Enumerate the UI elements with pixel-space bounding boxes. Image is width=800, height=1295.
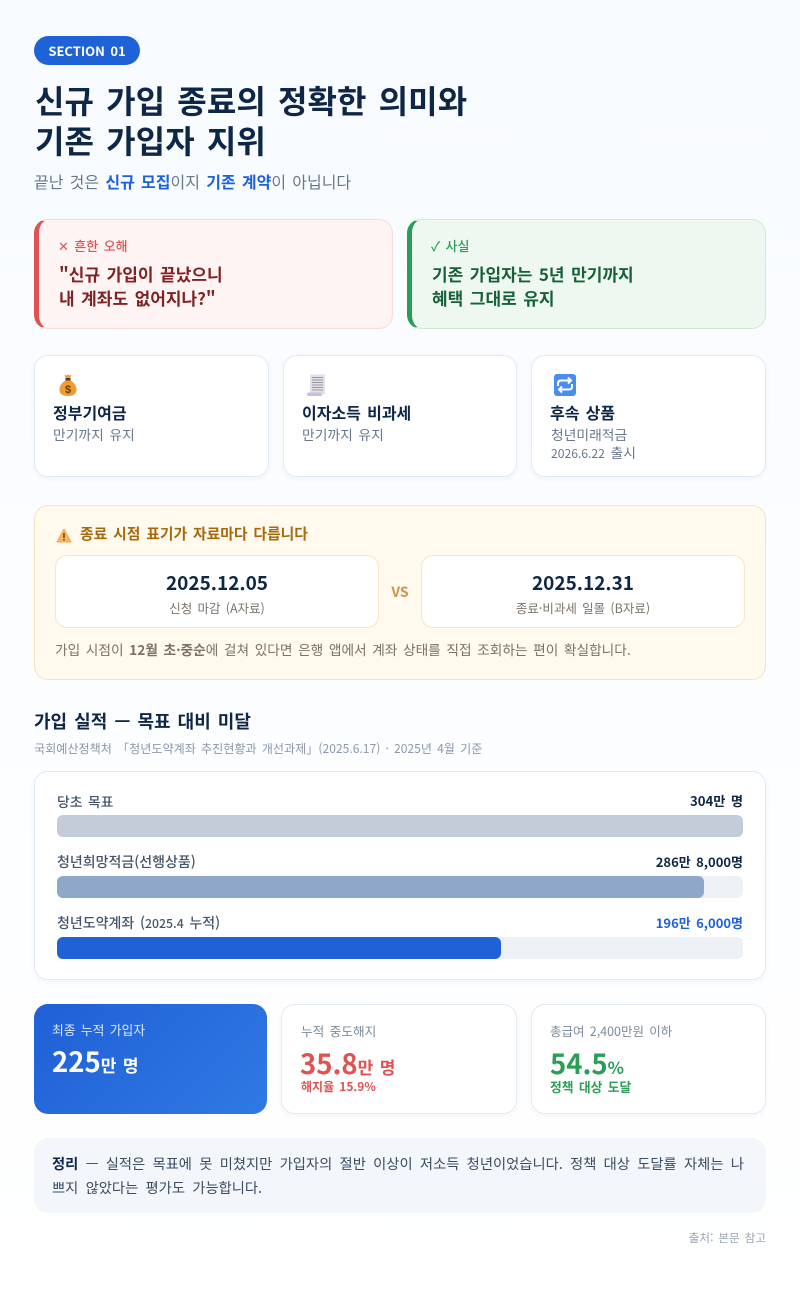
section badge <box>34 36 140 65</box>
stat label: 총급여 2,400만원 이하 <box>550 1021 672 1040</box>
card description: 청년미래적금 <box>551 424 627 444</box>
stat value: 225만 명 <box>52 1040 138 1080</box>
stat value: 54.5% <box>550 1042 624 1082</box>
bar: youth hope savings <box>57 852 743 898</box>
chart heading: 가입 실적 — 목표 대비 미달 <box>34 708 251 734</box>
card heading: 이자소득 비과세 <box>302 400 411 424</box>
subtitle: 끝난 것은 신규 모집이지 기존 계약이 아닙니다 <box>34 169 351 193</box>
card description: 만기까지 유지 <box>302 424 384 444</box>
icon: warning triangle <box>56 528 72 542</box>
panel: interest tax exemption card <box>283 355 517 477</box>
card description: 2026.6.22 출시 <box>551 442 636 462</box>
date B value: 2025.12.31 <box>532 569 634 596</box>
icon: repeat arrows <box>554 374 576 396</box>
title: 신규 가입 종료의 정확한 의미와 <box>35 77 467 123</box>
misconception quote <box>59 261 223 310</box>
stat value: 35.8만 명 <box>300 1042 395 1082</box>
stat note: 해지율 15.9% <box>301 1078 376 1095</box>
bar value: 196만 6,000명 <box>656 913 743 932</box>
date box A <box>55 555 379 628</box>
icon: receipt <box>307 374 325 396</box>
panel: fact <box>407 219 766 329</box>
chart source: 국회예산정책처 「청년도약계좌 추진현황과 개선과제」(2025.6.17) · 2025년 4월 기준 <box>34 740 482 757</box>
stat: cancellations <box>281 1004 517 1114</box>
panel: follow-up product card <box>531 355 766 477</box>
card description <box>551 424 636 462</box>
bar value: 304만 명 <box>690 791 743 810</box>
bar track and fill <box>57 937 743 959</box>
warning note: 가입 시점이 12월 초·중순에 걸쳐 있다면 은행 앱에서 계좌 상태를 직접 조회하는 편이 확실합니다. <box>55 639 631 659</box>
fact statement <box>432 261 634 310</box>
stat label: 누적 중도해지 <box>301 1021 376 1040</box>
date A caption: 신청 마감 (A자료) <box>169 598 265 617</box>
stat: total subscribers <box>34 1004 267 1114</box>
bar value: 286만 8,000명 <box>656 852 743 871</box>
stat note: 정책 대상 도달 <box>550 1077 631 1096</box>
bar track and fill <box>57 876 743 898</box>
date B caption: 종료·비과세 일몰 (B자료) <box>516 598 650 617</box>
bar label: 청년도약계좌 (2025.4 누적) <box>57 913 220 933</box>
card heading: 정부기여금 <box>53 400 127 424</box>
stat label: 최종 누적 가입자 <box>52 1020 145 1039</box>
panel: common misconception <box>34 219 393 329</box>
date A value: 2025.12.05 <box>166 569 268 596</box>
misconception label: ✕ 흔한 오해 <box>58 236 128 255</box>
misconception quote: "신규 가입이 끝났으니 <box>59 261 223 286</box>
title: 기존 가입자 지위 <box>35 117 266 163</box>
fact statement: 혜택 그대로 유지 <box>432 285 555 310</box>
fact statement: 기존 가입자는 5년 만기까지 <box>432 261 634 286</box>
panel: government contribution card <box>34 355 269 477</box>
summary box: 정리 — 실적은 목표에 못 미쳤지만 가입자의 절반 이상이 저소득 청년이었습니다. 정책 대상 도달률 자체는 나쁘지 않았다는 평가도 가능합니다. <box>52 1153 744 1198</box>
source note: 출처: 본문 참고 <box>689 1230 766 1246</box>
vs label: VS <box>391 582 409 602</box>
summary box <box>34 1138 766 1213</box>
date box B <box>421 555 745 628</box>
card heading: 후속 상품 <box>550 400 615 424</box>
icon: money bag: $ <box>65 384 71 396</box>
misconception quote: 내 계좌도 없어지나?" <box>59 285 216 310</box>
title <box>35 77 467 163</box>
icon: money bag <box>60 374 76 396</box>
bar label: 청년희망적금(선행상품) <box>57 852 196 872</box>
stat: low income share <box>531 1004 766 1114</box>
bar: youth leap account <box>57 913 743 959</box>
bar fill <box>57 815 743 837</box>
bar: original target <box>57 791 743 837</box>
card description: 만기까지 유지 <box>53 424 135 444</box>
warning heading: 종료 시점 표기가 자료마다 다릅니다 <box>80 523 308 544</box>
bar label: 당초 목표 <box>57 791 113 811</box>
fact label: ✓ 사실 <box>431 236 469 255</box>
bar chart <box>34 771 766 980</box>
section badge: SECTION 01 <box>48 41 126 60</box>
panel: end date discrepancy <box>34 505 766 680</box>
